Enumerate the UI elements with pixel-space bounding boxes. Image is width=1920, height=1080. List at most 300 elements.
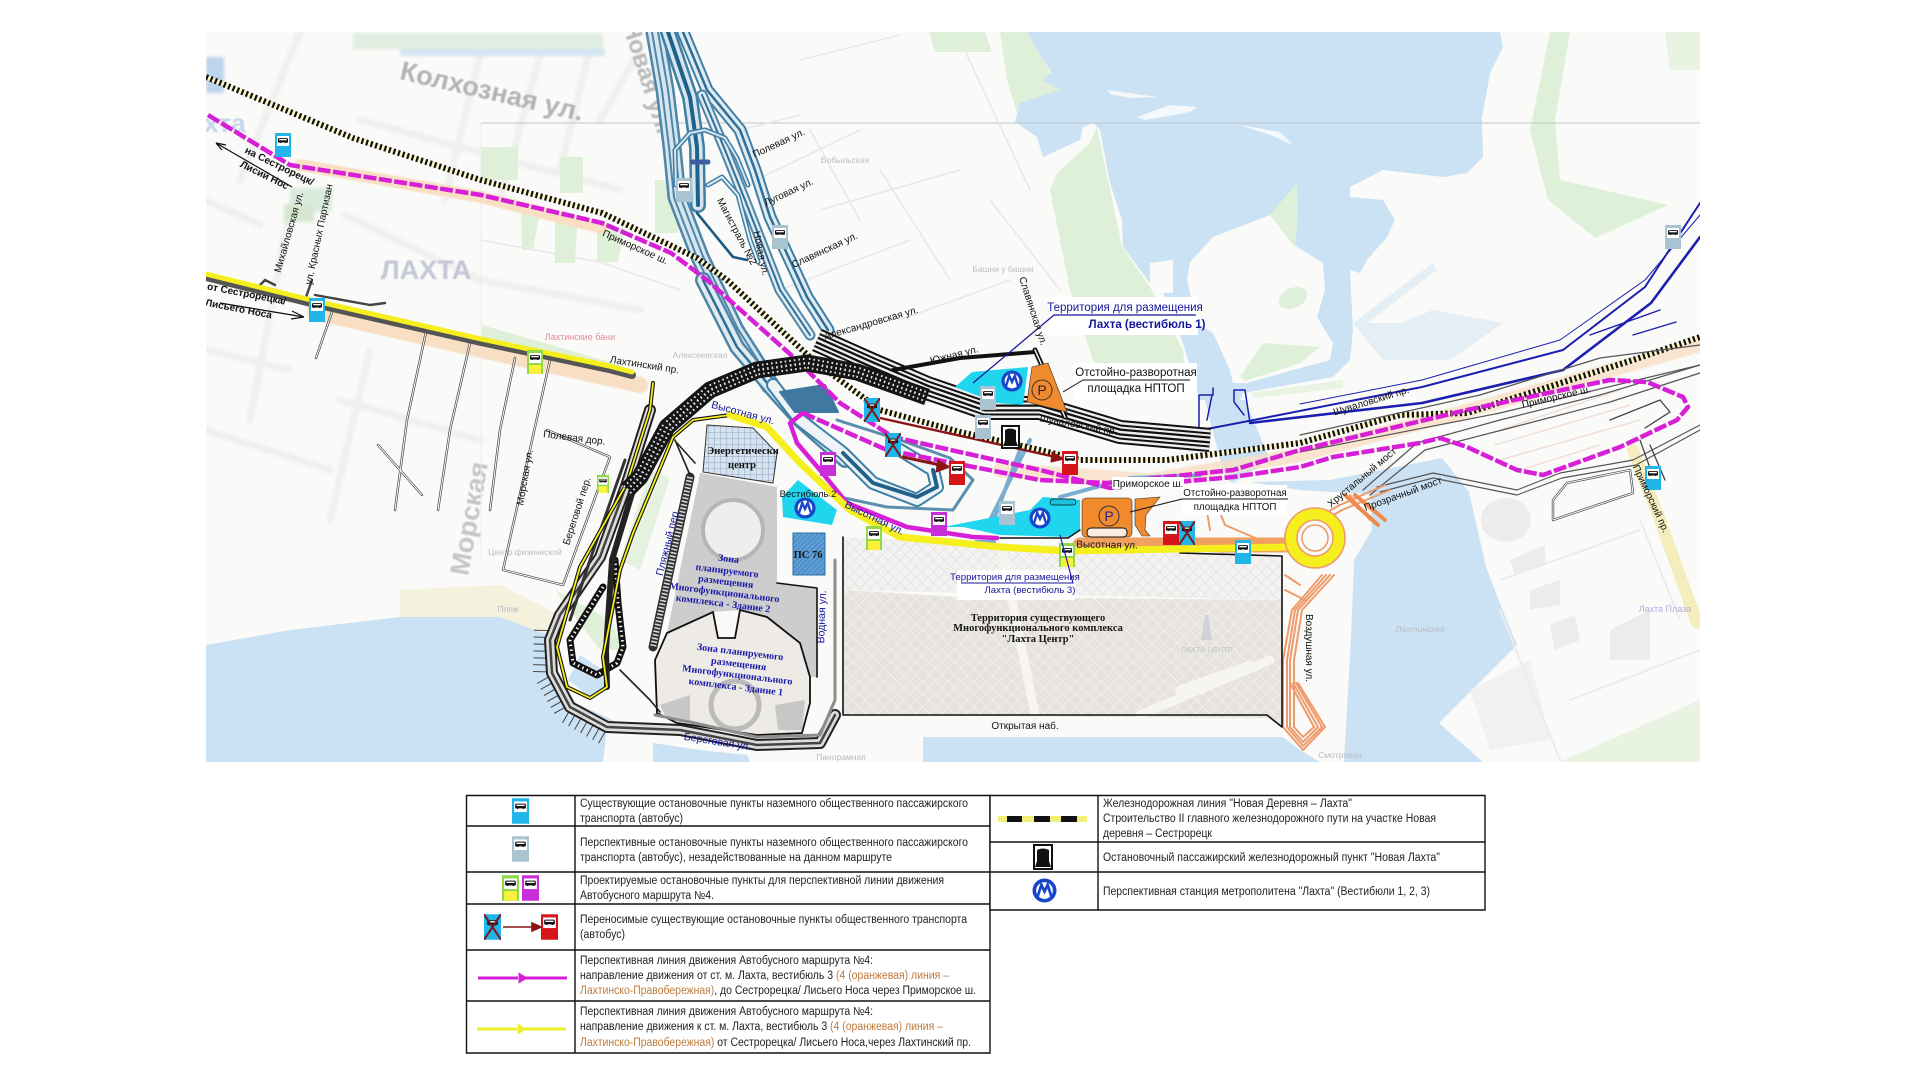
roundabout yellow ring (1291, 514, 1339, 562)
text: yellow route: Перспективная линия движения Автобусного маршрута №4: (580, 1006, 873, 1018)
text: relocated stops line 2: (автобус) (580, 929, 625, 941)
legend: left table (466, 796, 990, 1053)
blurred map label: Лахта fragment: хта (204, 108, 246, 138)
rail dashes (206, 77, 1700, 460)
east district (1470, 390, 1700, 760)
text: magenta route line 2: направление движения от ст. м. Лахта, вестибюль 3 (4 (оранжевая) линия – (580, 970, 950, 982)
text: yellow route line 3: Лахтинско-Правобережная) от Сестрорецка/ Лисьего Носа,через Лахтинский пр. (580, 1037, 971, 1049)
callout line (1063, 380, 1190, 392)
street label: Александровская ул. (823, 305, 920, 342)
arrow shaft (216, 143, 292, 187)
zone 2 line 5: комплекса - Здание 2 (675, 593, 771, 615)
railway line (206, 77, 1700, 460)
roundabout orange outer (1285, 508, 1345, 568)
vestibule 2 caption: Вестибюль 2 (780, 489, 836, 500)
overpass black centre (627, 363, 927, 490)
site title (953, 613, 1124, 645)
stop: green (597, 475, 609, 493)
icon: yellow line (477, 1026, 566, 1032)
water: white sand strips (1107, 90, 1293, 145)
water: south basins (653, 737, 1320, 762)
slavyanskaya track (1035, 350, 1065, 417)
street label: Приморское ш. (1521, 384, 1592, 411)
street label: Приморский пр. (1630, 463, 1671, 535)
callout line (961, 535, 1073, 583)
energy center (703, 425, 777, 483)
site lighter band (843, 537, 1282, 600)
water: inner loop pocket (568, 655, 605, 697)
parking pill (1087, 528, 1127, 537)
parking 2 ring (1099, 506, 1119, 526)
zone 2 label (667, 547, 784, 616)
roundabout orange inner (1302, 525, 1328, 551)
route main (208, 115, 1688, 488)
callout text 1: Отстойно-разворотная (1075, 367, 1197, 379)
text: rail stop: Остановочный пассажирский железнодорожный пункт "Новая Лахта" (1103, 852, 1440, 864)
water: channel near Shuvalovsky (1205, 400, 1270, 483)
callout text 1: Территория для размещения (950, 572, 1080, 583)
text: yellow route line 2: направление движения к ст. м. Лахта, вестибюль 3 (4 (оранжевая) линия – (580, 1021, 944, 1033)
stop: green (527, 350, 543, 374)
icon: relocation arrow (503, 923, 541, 931)
icon: train (1035, 848, 1051, 867)
route around coast yellow (557, 383, 730, 698)
POI: Панорамная: Панорамная (816, 752, 866, 762)
arrow text 2: Лисьего Носа (204, 298, 273, 321)
parking side area (1135, 497, 1160, 536)
stop: crossed out (864, 398, 880, 422)
zone 1 grey blocks (660, 695, 805, 730)
POI: Лахтинская гавань: Лахтинская (1395, 624, 1445, 634)
energy label line 2: центр (728, 460, 756, 471)
legend row: yellow route (477, 1006, 971, 1049)
icon: train frame (1034, 845, 1052, 869)
legend left grid (466, 796, 990, 1053)
callout: parking 2 (1130, 485, 1288, 515)
text: designed stops: Проектируемые остановочные пункты для перспективной линии движения (580, 875, 944, 887)
stop: grey (676, 178, 692, 202)
stop: crossed out (885, 433, 901, 457)
zone 2 line 1: Зона (717, 553, 740, 566)
callout box (1182, 485, 1287, 515)
street outline white core (316, 312, 1633, 585)
bundle 2 core (668, 32, 698, 205)
legend: right table (990, 796, 1485, 910)
relocation arrowhead 1 (1051, 452, 1064, 462)
second road pair (606, 467, 640, 687)
zone 2 line 2: планируемого (695, 562, 759, 581)
hatched overpass arc (627, 363, 927, 490)
stop: grey (999, 501, 1015, 525)
steel-blue blob (780, 385, 838, 412)
title line 2: Многофункционального комплекса (953, 623, 1124, 634)
title line 1: Территория существующего (971, 613, 1105, 624)
concourse shapes (975, 540, 998, 553)
callout: vestibule 1 (973, 297, 1206, 383)
stop: cyan (275, 133, 291, 157)
track bundle black (817, 340, 1210, 440)
inset house numbers and POI (488, 155, 1691, 762)
coastal road dark (550, 410, 835, 745)
orange road bridge bars (1345, 495, 1385, 525)
text: magenta route: Перспективная линия движения Автобусного маршрута №4: (580, 955, 873, 967)
relocation line 1 (880, 418, 1060, 458)
callout text 2: площадка НПТОП (1087, 383, 1185, 395)
overpass black (627, 363, 927, 490)
south road (655, 560, 835, 737)
text: railway: Железнодорожная линия "Новая Деревня – Лахта" (1103, 798, 1352, 810)
zone 2 line 4: Многофункционального (669, 581, 780, 605)
rail station frame (1002, 426, 1019, 448)
street label: Хрустальный мост (1326, 446, 1399, 510)
green parks (481, 32, 1700, 762)
text: planned stops line 2: транспорта (автобус), незадействованные на данном маршруте (580, 852, 892, 864)
street label: Воздушная ул. (1303, 614, 1314, 682)
street label: Михайловская ул. (273, 191, 306, 274)
bundle 3 light (683, 32, 828, 330)
light-blue ramps (985, 440, 1200, 530)
legend row: railway (998, 798, 1436, 840)
legend row: metro (1033, 879, 1430, 902)
bundle 3 outer (683, 32, 828, 330)
callout text 2: площадка НПТОП (1194, 502, 1276, 513)
callout text 1: Территория для размещения (1047, 302, 1203, 314)
stop: grey (772, 225, 788, 249)
stop: purple (931, 512, 947, 536)
coastal road (550, 410, 835, 745)
Lakhta Center site (843, 537, 1282, 727)
roundabout orange ring (1297, 520, 1333, 556)
zone 1 line 2: размещения (710, 656, 767, 673)
text: magenta route line 3: Лахтинско-Правобережная), до Сестрорецка/ Лисьего Носа через Приморское ш. (580, 985, 976, 997)
arrow text 1: от Сестрорецка/ (206, 282, 287, 308)
bundle 1 light (655, 32, 770, 385)
street label: Южная ул. (929, 344, 980, 367)
route dark edge (206, 277, 632, 375)
bundle 4 outer (702, 95, 810, 335)
hairpin (708, 177, 758, 262)
arrow text 2: Лисий Нос (238, 159, 291, 192)
top ring (675, 130, 748, 185)
street label: Морская ул. (515, 449, 536, 506)
vestibule 3 (943, 497, 1160, 538)
bundle 5 core (703, 280, 845, 460)
callout text 2: Лахта (вестибюль 3) (985, 585, 1075, 596)
rail base (206, 77, 1700, 460)
text: existing stops: Существующие остановочные пункты наземного общественного пассажирского (580, 798, 968, 810)
street label: Полевая дор. (543, 429, 606, 448)
callout box (957, 570, 1075, 600)
plate (1112, 477, 1184, 489)
street label: Высотная ул. (1076, 539, 1138, 552)
street label: Высотная ул. (710, 399, 776, 427)
stop: grey (980, 386, 996, 410)
top ring core (675, 130, 748, 185)
direction arrow: from Sestroretsk (204, 282, 304, 321)
stop: grey (1665, 225, 1681, 249)
zone 1 line 4: комплекса - Здание 1 (688, 676, 784, 699)
arrow shaft (220, 303, 304, 319)
track bundle white (817, 340, 1210, 440)
street label: Славянская ул. (1016, 276, 1049, 347)
vestibule 3 outline (1000, 530, 1080, 538)
vestibule 3 surface (943, 497, 1080, 537)
zone 2 rotunda (703, 500, 763, 560)
water: Lakhtinskaya bay (1250, 458, 1517, 762)
bundle 5 light (703, 280, 845, 460)
text: railway line 3: деревня – Сестрорецк (1103, 828, 1213, 840)
central loop inner (773, 385, 937, 500)
legend row: existing stops (512, 798, 968, 825)
route loop (790, 413, 997, 538)
POI: Алексеевская Дубрава: Алексеевская (673, 350, 728, 360)
plate text: Приморское ш. (1113, 479, 1183, 490)
street label: Прозрачный мост (1363, 475, 1444, 514)
vestibule 1 metro icon (1001, 370, 1023, 392)
plyazhny strip dots (653, 477, 690, 647)
energy label line 1: Энергетически (707, 446, 779, 457)
energy center label (707, 446, 779, 471)
POI: Лахтинские бани: Лахтинские бани (545, 332, 615, 342)
icon: green stop (502, 875, 519, 901)
vestibule 1 parking (1027, 363, 1067, 412)
parking letter: P (1037, 382, 1047, 398)
bundle 1 core (655, 32, 770, 385)
bundle 4 core (702, 95, 810, 335)
black track bundle (817, 340, 1210, 440)
site white road lines (1000, 540, 1270, 715)
roundabout (1285, 508, 1345, 568)
island in gulf (1187, 215, 1333, 383)
parking area 2 (1082, 498, 1132, 537)
street label: Приморское ш. (601, 228, 669, 267)
bundle 3 core (683, 32, 828, 330)
icon: metro (1033, 879, 1056, 902)
overpass centre dots (627, 363, 927, 490)
bundle 1 outer (655, 32, 770, 385)
island green patches (1240, 283, 1343, 398)
zone 2 outline (777, 583, 817, 677)
blurred map label: Лахта: ЛАХТА (381, 255, 471, 285)
street label: Луговая ул. (763, 177, 815, 209)
coastal road core (550, 410, 835, 745)
street label: Береговой пер. (561, 476, 594, 547)
Primorsky road beige (1633, 450, 1697, 623)
icon: rail base (998, 816, 1087, 822)
map panel (204, 19, 1700, 762)
street label: Пляжный пер. (654, 507, 682, 577)
street label: Береговая ул. (683, 731, 752, 753)
route vysotnaya (730, 415, 1290, 551)
arrow text 1: на Сестрорецк/ (243, 145, 316, 188)
zone 1 line 1: Зона планируемого (696, 642, 784, 663)
magenta bus route (208, 115, 1688, 538)
street label: Шуваловский пр. (1039, 413, 1118, 438)
parking ring (1032, 380, 1052, 400)
site border (843, 537, 1282, 727)
planned building zone 1 (655, 610, 810, 735)
street label: Высотная ул. (843, 499, 906, 538)
pink rail yard lines (1495, 390, 1640, 470)
beach strip (400, 585, 560, 633)
central loop outer (773, 385, 937, 500)
orange-beige road bands (300, 165, 1700, 480)
icon: red stop (541, 914, 558, 940)
interior loop (570, 560, 623, 675)
track bundle white 3 (817, 340, 1210, 440)
legend row: designed stops (502, 875, 944, 902)
stop: red (1062, 451, 1078, 475)
stop: cyan (309, 298, 325, 322)
central loop core (843, 453, 937, 497)
map base land (206, 32, 1700, 762)
callout box (1049, 297, 1198, 335)
substation ПС 76 (793, 533, 825, 575)
street label: Полевая ул. (751, 127, 807, 161)
oval ramp (620, 440, 695, 712)
planned building zone 2 (667, 473, 817, 677)
vestibule 3 canopy (1050, 499, 1076, 505)
south street track (893, 352, 1035, 370)
street grid inset (481, 35, 1060, 320)
bundle 5 outer (703, 280, 845, 460)
parking 2 letter: P (1104, 508, 1114, 524)
stop: green (1059, 543, 1075, 567)
callout line (1130, 499, 1288, 512)
POI: Башни у башни: Башни у башни (972, 264, 1034, 274)
street outlines (260, 280, 1633, 585)
icon: magenta line (478, 975, 567, 981)
relocation line 2 (903, 457, 945, 466)
vestibule 3 metro icon (1029, 507, 1051, 529)
POI: Лахта Плаза: Лахта Плаза (1639, 604, 1691, 614)
left blue and green smudges (206, 33, 605, 222)
POI: Смотровая: Смотровая (1318, 750, 1362, 760)
callout text 2: Лахта (вестибюль 1) (1089, 319, 1206, 331)
text: existing stops line 2: транспорта (автобус) (580, 813, 683, 825)
text: relocated stops: Переносимые существующие остановочные пункты общественного транспорта (580, 914, 968, 926)
east district pale buildings (1470, 498, 1650, 750)
street label: Открытая наб. (991, 720, 1059, 732)
blurred outer base map streets (206, 32, 640, 520)
stop: crossed out (1179, 521, 1195, 545)
street label: Лахтинский пр. (609, 355, 680, 376)
parking 2 mark (1099, 506, 1119, 526)
third road pair (570, 460, 625, 620)
text: designed stops line 2: Автобусного маршрута №4. (580, 890, 714, 902)
POI: Центр физической культуры: Центр физической (488, 547, 562, 557)
stop: cyan (1645, 466, 1661, 490)
stop: grey (975, 415, 991, 439)
vestibule 1 surface (955, 367, 1028, 405)
stop: cyan (1235, 540, 1251, 564)
route around coast (557, 383, 730, 698)
grey bridges (1300, 345, 1700, 495)
hairpin core (708, 177, 758, 262)
blue-grey road interchange (655, 32, 1200, 530)
text: railway line 2: Строительство II главного железнодорожного пути на участке Новая (1103, 813, 1436, 825)
stop: red (949, 461, 965, 485)
street label: Славянская ул. (790, 231, 860, 271)
track bundle white 2 (817, 340, 1210, 440)
text: metro: Перспективная станция метрополитена "Лахта" (Вестибюли 1, 2, 3) (1103, 886, 1430, 898)
tower label: ЛАХТА ЦЕНТР (1181, 645, 1233, 654)
water: gulf upper (1015, 32, 1503, 400)
title line 3: "Лахта Центр" (1002, 634, 1074, 645)
plyazhny strip (653, 477, 690, 647)
blue Shuvalovsky lines (1199, 203, 1700, 442)
callout text 1: Отстойно-разворотная (1183, 488, 1287, 499)
callout line (973, 315, 1196, 383)
track bundle black 2 (817, 340, 1210, 440)
legend row: relocated stops (484, 914, 968, 941)
street label: Магистраль №2 (714, 197, 759, 267)
bundle 2 light (668, 32, 698, 205)
slavyanskaya core (1035, 350, 1065, 417)
route yellow (206, 274, 632, 372)
island green wedge (1270, 183, 1298, 247)
zone 2 line 3: размещения (697, 573, 755, 591)
POI: Пляж: Пляж (497, 604, 519, 614)
street label: ул. Красных Партизан (304, 183, 336, 286)
icon: grey stop (512, 836, 529, 862)
grey road outline east (1610, 400, 1670, 482)
bundle 2 outer (668, 32, 698, 205)
blurred map label: Колхозная ул.: Колхозная ул. (397, 56, 587, 127)
zone 1 line 3: Многофункционального (682, 663, 793, 688)
icon: rail station (1002, 426, 1019, 448)
callout: vestibule 3 (950, 535, 1080, 600)
legend row: rail stop (1034, 845, 1440, 869)
icon: purple stop (522, 875, 539, 901)
vestibule 2 (780, 480, 837, 525)
street label: Водная ул. (815, 590, 829, 644)
legend row: planned stops (512, 836, 968, 864)
zone 1 rotunda (711, 681, 759, 729)
legend row: magenta route (478, 955, 976, 997)
inset map left border (480, 123, 482, 560)
icon: rail dashes (1007, 816, 1077, 822)
vestibule 1 (955, 363, 1067, 412)
direction arrow: to Sestroretsk (216, 143, 316, 192)
yellow bus route (206, 274, 1290, 698)
relocation arrowhead 2 (936, 460, 950, 472)
legend right grid (990, 796, 1485, 910)
callout: parking 1 (1063, 363, 1197, 400)
blurred map label: Морская: Морская (444, 459, 494, 578)
blurred map label: Новая ул.: Новая ул. (616, 19, 678, 137)
site fill (843, 590, 1282, 727)
east grid (1500, 520, 1700, 760)
stop: red (1163, 521, 1179, 545)
coastal road light (550, 410, 835, 745)
blue overpass tab (692, 160, 708, 164)
callout box (1073, 363, 1197, 400)
seawall ticks (544, 630, 608, 736)
stop: green (866, 526, 882, 550)
bundle 4 light (702, 95, 810, 335)
water: gulf lower left (206, 617, 607, 762)
track bundle black 3 (817, 340, 1210, 440)
street label: Шуваловский пр. (1332, 385, 1411, 418)
interior loop dots (570, 560, 623, 675)
substation label: ПС 76 (794, 550, 822, 561)
text: planned stops: Перспективные остановочные пункты наземного общественного пассажирского (580, 837, 968, 849)
street label: Новая ул. (750, 230, 771, 277)
dark loop (697, 213, 747, 260)
stop: purple (820, 452, 836, 476)
wide loop (830, 420, 973, 510)
